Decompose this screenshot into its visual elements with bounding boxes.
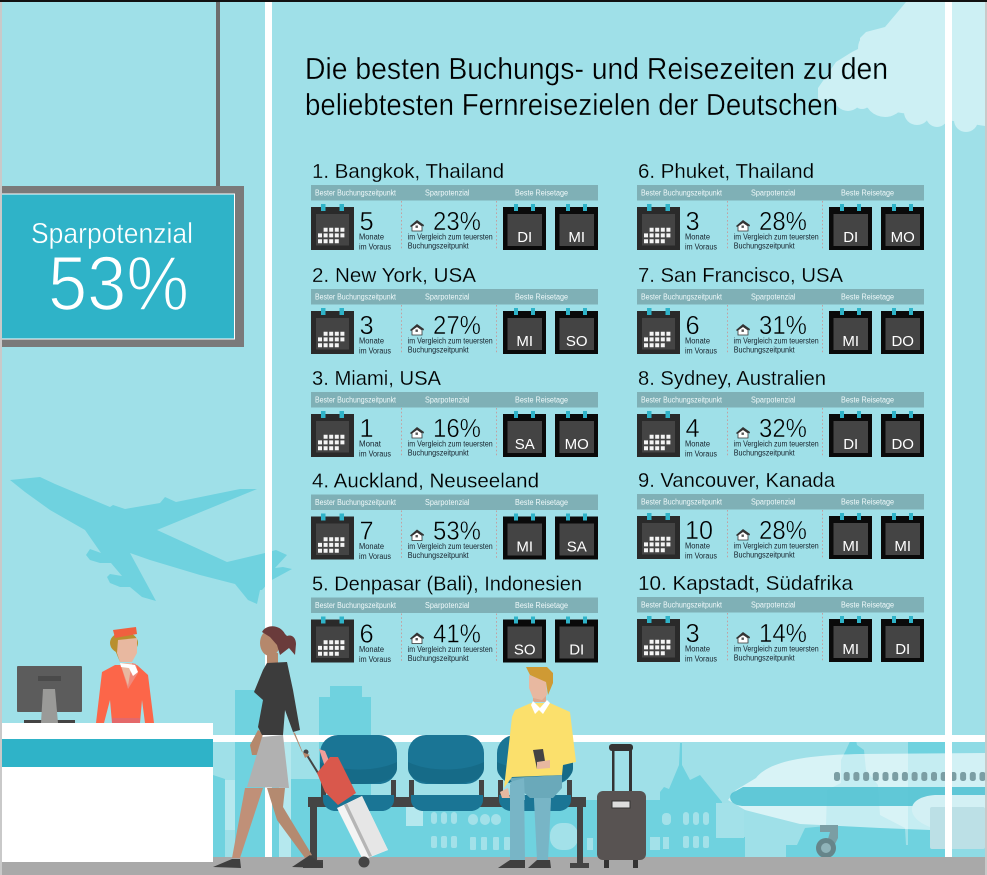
- card 1: Bangkok: im Voraus: [359, 242, 391, 251]
- card 1: Bangkok: 5: [360, 208, 374, 236]
- card 4: Auckland: 53%: [433, 518, 481, 546]
- card 10: Kapstadt: 14%: [759, 620, 807, 648]
- card 10: Kapstadt: MI: [842, 641, 859, 658]
- card 1: Bangkok: [311, 160, 598, 251]
- card 9: Vancouver: im Vergleich zum teuersten: [734, 541, 819, 550]
- card 9: Vancouver: Buchungszeitpunkt: [734, 551, 795, 560]
- card 10: Kapstadt: Buchungszeitpunkt: [734, 654, 795, 663]
- card 4: Auckland: SA: [567, 538, 587, 556]
- card 2: New York: im Vergleich zum teuersten: [408, 336, 493, 345]
- card 9: Vancouver: 9. Vancouver, Kanada: [638, 469, 836, 492]
- card 8: Sydney: DO: [891, 436, 914, 453]
- card 9: Vancouver: 28%: [759, 517, 807, 545]
- card 3: Miami: im Vergleich zum teuersten: [408, 439, 493, 448]
- card 1: Bangkok: im Vergleich zum teuersten: [408, 232, 493, 241]
- card 10: Kapstadt: DI: [895, 641, 910, 658]
- seat 3: [497, 735, 573, 811]
- card 5: Denpasar: SO: [514, 642, 536, 658]
- card 2: New York: im Voraus: [359, 346, 391, 355]
- card 7: San Francisco: 6: [686, 312, 700, 340]
- card 2: New York: Buchungszeitpunkt: [408, 346, 469, 355]
- card 4: Auckland: Monate: [359, 542, 385, 551]
- card 9: Vancouver: MI: [894, 538, 911, 555]
- plane silhouette in the sky: [10, 477, 292, 604]
- card 5: Denpasar: im Vergleich zum teuersten: [408, 645, 493, 654]
- card 3: Miami: 3. Miami, USA: [312, 367, 441, 390]
- card 1: Bangkok: 23%: [433, 208, 481, 236]
- card 1: Bangkok: Buchungszeitpunkt: [408, 242, 469, 251]
- card 2: New York: SO: [566, 333, 588, 350]
- cloud: [818, 2, 985, 132]
- floor: [0, 857, 987, 875]
- card 7: San Francisco: im Voraus: [685, 346, 717, 355]
- card 8: Sydney: [637, 367, 924, 458]
- skyline: [213, 686, 985, 857]
- card 7: San Francisco: Buchungszeitpunkt: [734, 346, 795, 355]
- card 3: Miami: MO: [565, 436, 589, 453]
- card 8: Sydney: 32%: [759, 415, 807, 443]
- card 1: Bangkok: DI: [517, 229, 532, 246]
- card 6: Phuket: MO: [891, 229, 915, 246]
- card 8: Sydney: im Voraus: [685, 449, 717, 458]
- card 7: San Francisco: 7. San Francisco, USA: [638, 264, 843, 287]
- card 6: Phuket: im Voraus: [685, 242, 717, 251]
- card 2: New York: 2. New York, USA: [312, 264, 476, 287]
- card 2: New York: 27%: [433, 312, 481, 340]
- card 9: Vancouver: [637, 469, 924, 560]
- card 5: Denpasar: 41%: [433, 620, 481, 648]
- check-in monitor: [17, 666, 82, 723]
- card 7: San Francisco: 31%: [759, 312, 807, 340]
- card 5: Denpasar: 5. Denpasar (Bali), Indonesien: [312, 572, 582, 596]
- card 4: Auckland: im Vergleich zum teuersten: [408, 542, 493, 551]
- card 3: Miami: Buchungszeitpunkt: [408, 449, 469, 458]
- card 9: Vancouver: Monate: [685, 542, 711, 551]
- card 3: Miami: 1: [360, 415, 374, 443]
- card 5: Denpasar: Monate: [359, 645, 385, 654]
- sign value: 53%: [48, 241, 189, 327]
- card 5: Denpasar: Buchungszeitpunkt: [408, 654, 469, 663]
- card 6: Phuket: im Vergleich zum teuersten: [734, 232, 819, 241]
- card 8: Sydney: 4: [686, 415, 700, 443]
- title: beliebtesten Fernreisezielen der Deutschen: [305, 88, 838, 122]
- card 10: Kapstadt: im Voraus: [685, 654, 717, 663]
- card 6: Phuket: Buchungszeitpunkt: [734, 242, 795, 251]
- rolling suitcase: [304, 749, 388, 868]
- card 9: Vancouver: 10: [685, 517, 713, 545]
- card 3: Miami: im Voraus: [359, 449, 391, 458]
- card 6: Phuket: 6. Phuket, Thailand: [638, 160, 814, 183]
- card 3: Miami: [311, 367, 598, 458]
- card 2: New York: Monate: [359, 337, 385, 346]
- card 3: Miami: Monat: [359, 440, 382, 449]
- card 8: Sydney: im Vergleich zum teuersten: [734, 439, 819, 448]
- card 5: Denpasar: [311, 572, 598, 664]
- card 4: Auckland: MI: [516, 538, 533, 556]
- card 3: Miami: 16%: [433, 415, 481, 443]
- window frame: [213, 2, 985, 857]
- card 1: Bangkok: MI: [568, 229, 585, 246]
- standing luggage: [597, 744, 646, 868]
- card 10: Kapstadt: Monate: [685, 645, 711, 654]
- card 6: Phuket: DI: [843, 229, 858, 246]
- card 6: Phuket: Monate: [685, 233, 711, 242]
- card 7: San Francisco: im Vergleich zum teuersten: [734, 336, 819, 345]
- card 2: New York: [311, 264, 598, 355]
- card 3: Miami: SA: [515, 436, 535, 453]
- check-in desk: [2, 723, 213, 862]
- card 9: Vancouver: MI: [842, 538, 859, 555]
- card 7: San Francisco: Monate: [685, 337, 711, 346]
- card 4: Auckland: [311, 470, 598, 561]
- card 2: New York: MI: [516, 333, 533, 350]
- card 2: New York: 3: [360, 312, 374, 340]
- card 8: Sydney: Monate: [685, 440, 711, 449]
- card 1: Bangkok: 1. Bangkok, Thailand: [312, 160, 504, 183]
- card 8: Sydney: DI: [843, 436, 858, 453]
- card 4: Auckland: 4. Auckland, Neuseeland: [312, 470, 539, 492]
- card 7: San Francisco: MI: [842, 333, 859, 350]
- card 10: Kapstadt: [637, 572, 924, 663]
- card 10: Kapstadt: im Vergleich zum teuersten: [734, 644, 819, 653]
- card 8: Sydney: Buchungszeitpunkt: [734, 449, 795, 458]
- card 7: San Francisco: DO: [891, 333, 914, 350]
- card 4: Auckland: 7: [360, 518, 374, 546]
- card 4: Auckland: im Voraus: [359, 552, 391, 561]
- check-in agent: [96, 627, 154, 723]
- card 7: San Francisco: [637, 264, 924, 355]
- card 8: Sydney: 8. Sydney, Australien: [638, 367, 826, 390]
- hanging sign: [2, 2, 244, 347]
- title: Die besten Buchungs- und Reisezeiten zu den: [305, 52, 888, 86]
- walking woman: [213, 626, 323, 868]
- card 4: Auckland: Buchungszeitpunkt: [408, 551, 469, 560]
- card 5: Denpasar: DI: [569, 642, 584, 658]
- card 10: Kapstadt: 3: [686, 620, 700, 648]
- waiting bench: [303, 735, 589, 868]
- seat 2: [408, 735, 484, 811]
- card 5: Denpasar: 6: [360, 620, 374, 648]
- card 10: Kapstadt: 10. Kapstadt, Südafrika: [638, 572, 854, 595]
- card 1: Bangkok: Monate: [359, 233, 385, 242]
- seat 1: [320, 735, 397, 811]
- card 9: Vancouver: im Voraus: [685, 551, 717, 560]
- sign label: Sparpotenzial: [31, 218, 193, 250]
- title: [305, 52, 888, 122]
- airliner outside the window: [728, 753, 986, 858]
- card 6: Phuket: 28%: [759, 208, 807, 236]
- card 5: Denpasar: im Voraus: [359, 655, 391, 664]
- card 6: Phuket: 3: [686, 208, 700, 236]
- card 6: Phuket: [637, 160, 924, 251]
- seated man: [498, 667, 576, 868]
